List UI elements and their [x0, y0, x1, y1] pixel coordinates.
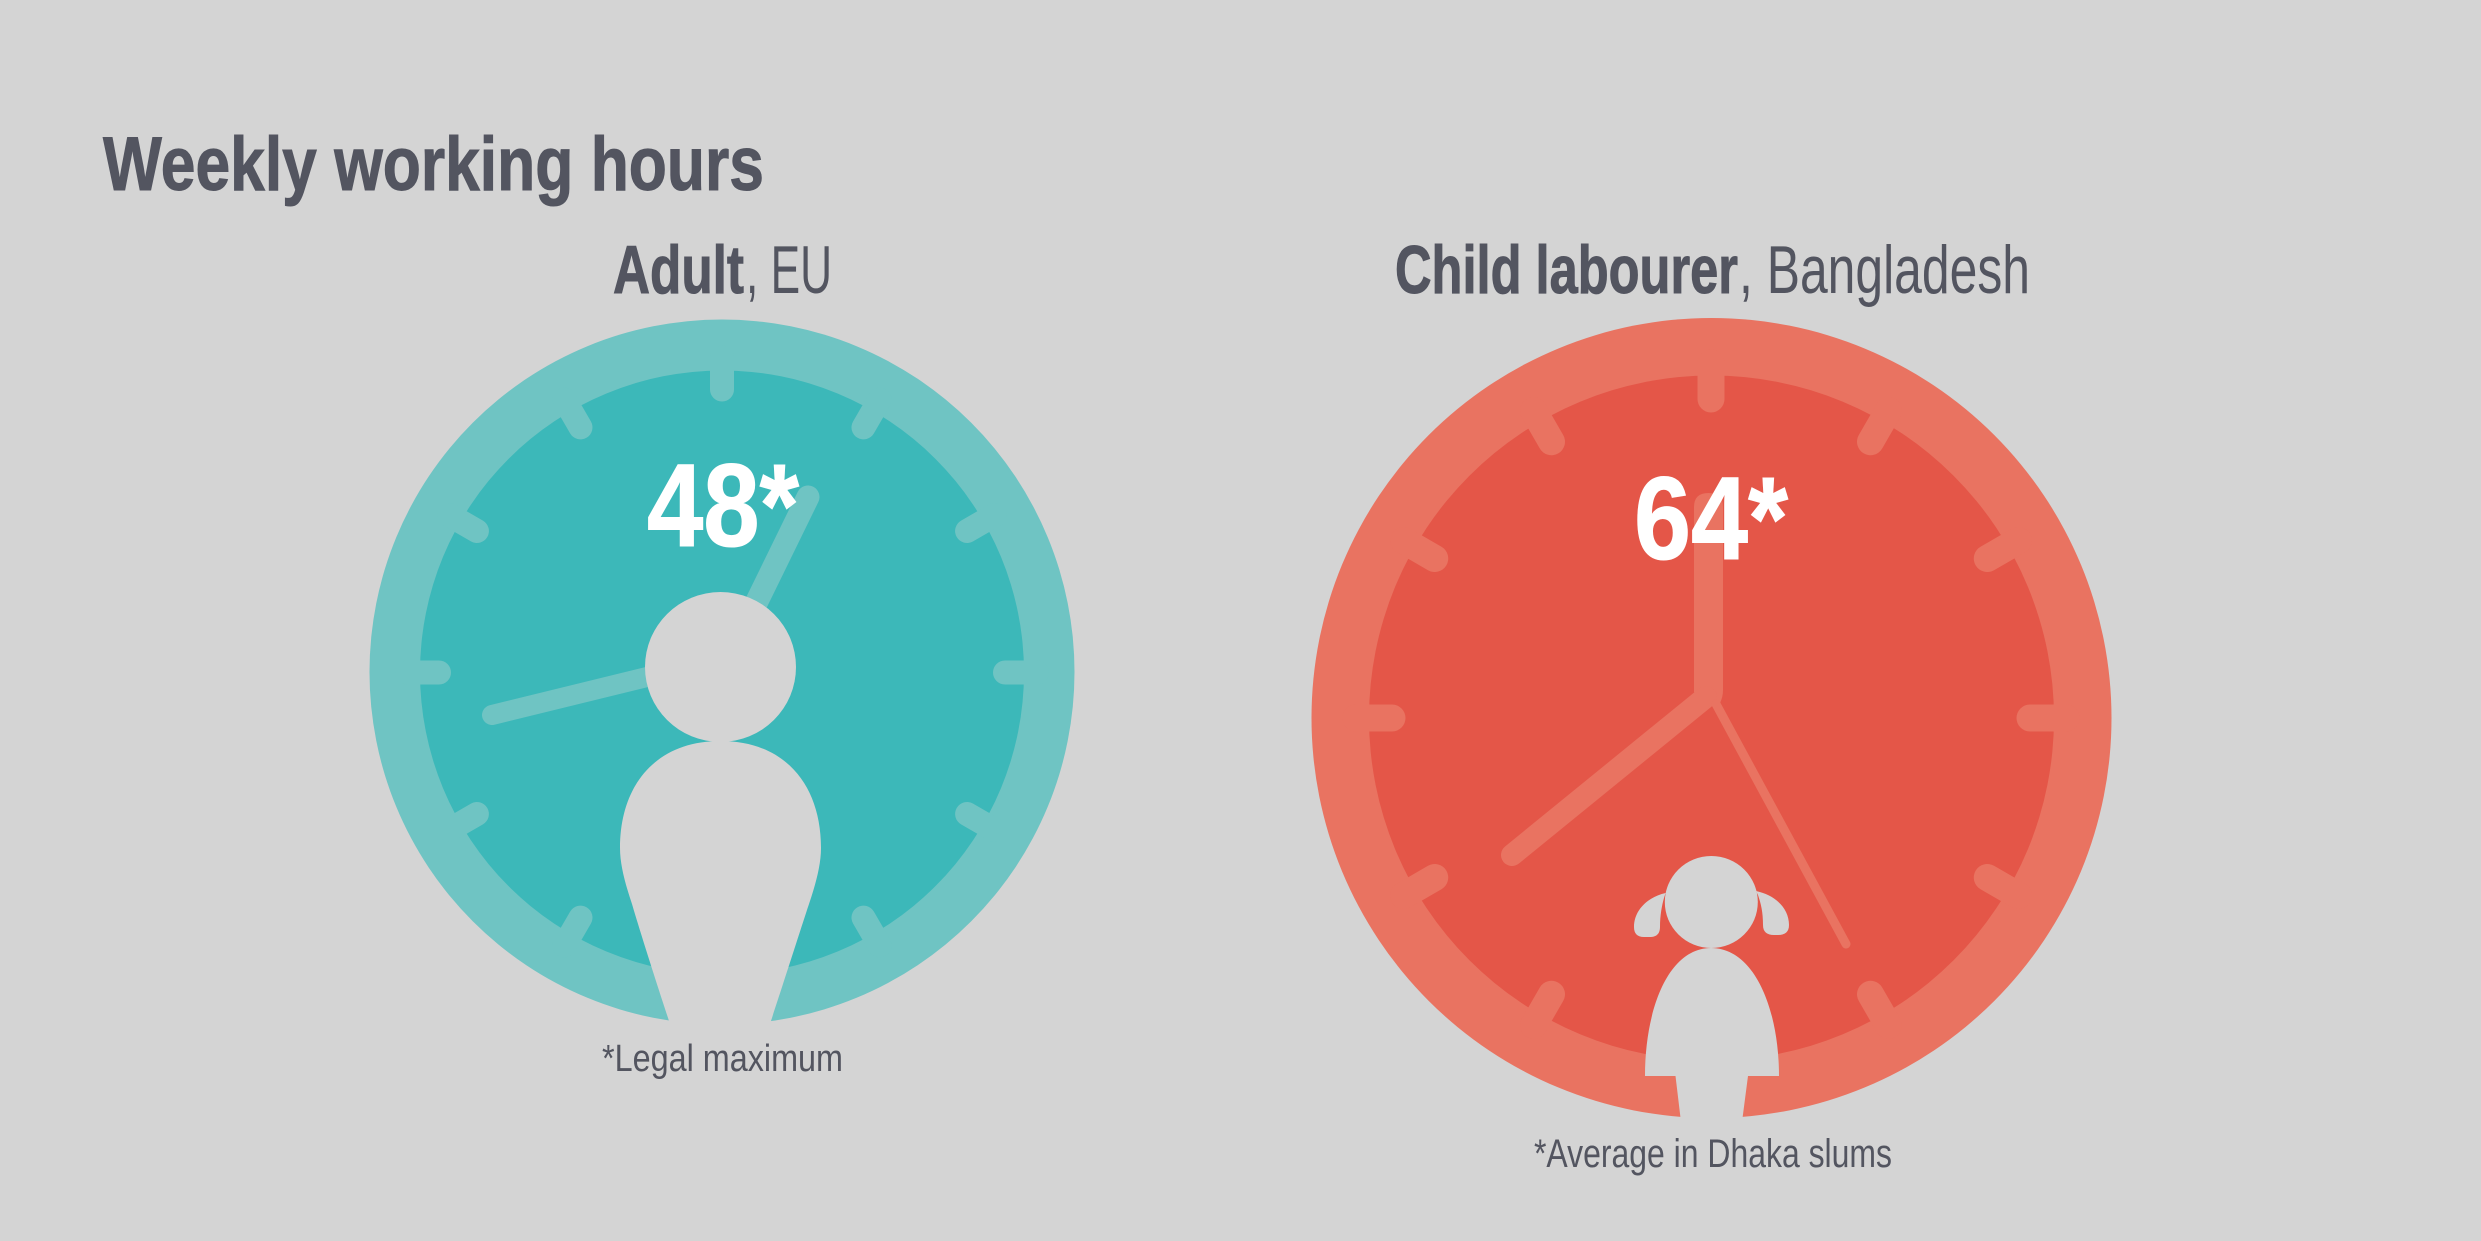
hour hand: child: [1512, 697, 1706, 855]
footnote: legal maximum: *Legal maximum: [602, 1038, 843, 1080]
second hand: child: [1716, 704, 1846, 944]
heading: adult EU: , EU: [746, 232, 832, 308]
icon: adult figure: [620, 592, 821, 1030]
footnote: average in Dhaka slums: *Average in Dhaka slums: [1534, 1132, 1892, 1176]
icon: child figure: [1634, 856, 1789, 1122]
hour hand: adult: [492, 664, 700, 715]
heading: child labourer Bangladesh: Child labourer: [1395, 232, 1738, 308]
hour ticks: adult: [407, 358, 1037, 945]
value: 64: 64*: [1634, 453, 1788, 585]
panel: child clock: [1312, 318, 2112, 1122]
clock ring: adult: [370, 320, 1074, 1024]
minute hand: adult: [740, 497, 808, 636]
panel: adult clock: [370, 320, 1074, 1030]
hour ticks: child: [1356, 363, 2066, 1025]
heading: child labourer Bangladesh: , Bangladesh: [1739, 232, 2030, 308]
title: Weekly working hours: [103, 122, 764, 207]
clock face: child: [1369, 376, 2054, 1060]
value: 48: 48*: [647, 440, 799, 572]
clock face: adult: [420, 370, 1024, 974]
minute hand: child: [1694, 493, 1723, 706]
clock ring: child: [1312, 318, 2112, 1118]
heading: adult EU: Adult: [613, 232, 744, 308]
